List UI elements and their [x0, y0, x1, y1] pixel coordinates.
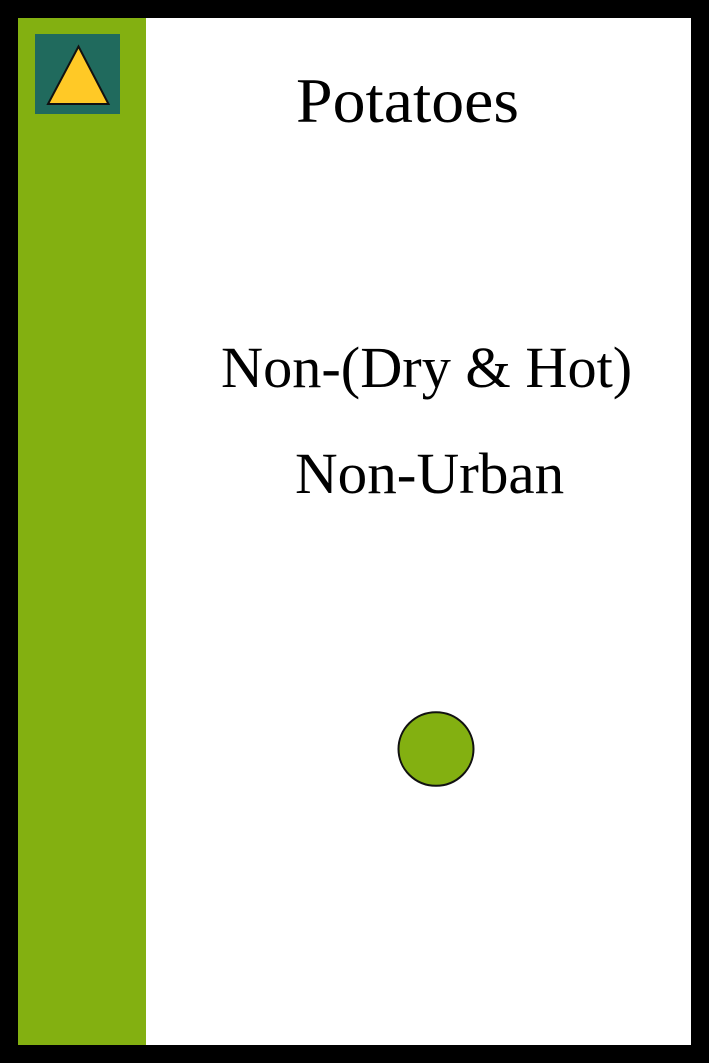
green sidebar	[18, 18, 146, 1045]
icon: yellow triangle on teal square	[35, 34, 120, 114]
icon: green circle	[398, 711, 474, 787]
climate label: Non-(Dry & Hot)	[221, 335, 632, 400]
title: Potatoes	[296, 65, 519, 136]
location label: Non-Urban	[295, 441, 564, 506]
